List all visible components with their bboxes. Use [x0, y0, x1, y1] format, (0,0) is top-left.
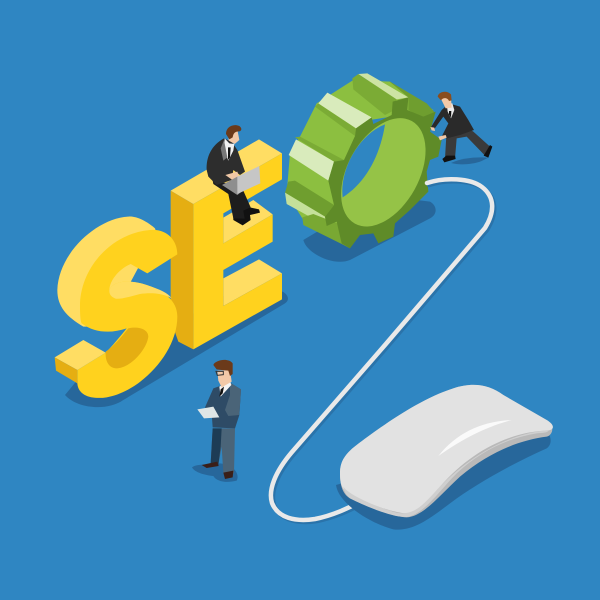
- letter E: [171, 139, 282, 349]
- gear with shadow: [285, 73, 443, 262]
- person: sitting man with laptop: [207, 125, 260, 225]
- mouse cable: [271, 179, 494, 522]
- letter S: [55, 217, 177, 398]
- letter S and E with shadow: [55, 139, 288, 407]
- person: standing man with tablet: [192, 360, 241, 482]
- person: man pushing gear: [430, 92, 492, 164]
- computer mouse: [336, 385, 553, 530]
